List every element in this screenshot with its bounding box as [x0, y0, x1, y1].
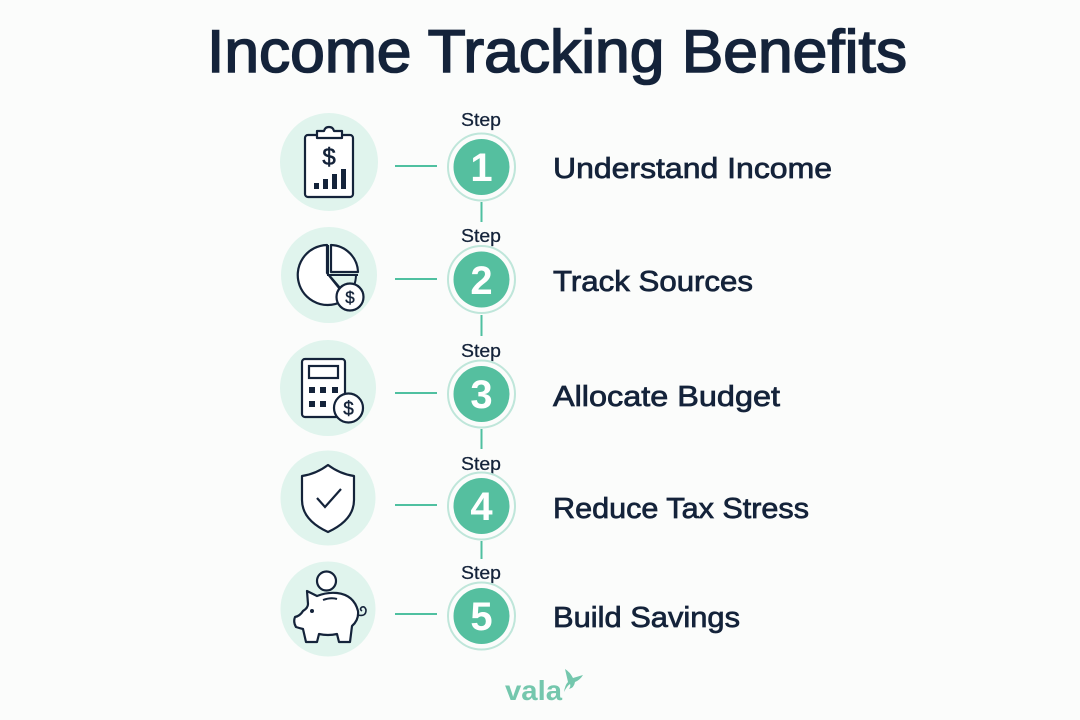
step badge 1: 1 [470, 146, 493, 190]
step row 1 [280, 109, 832, 211]
step label: Step [461, 453, 501, 474]
icon: clipboard with chart [280, 113, 378, 211]
step badge 5: 5 [470, 595, 493, 639]
step row 3 [280, 340, 780, 436]
icon: calculator with coin: $ [343, 399, 354, 420]
connector [395, 613, 437, 615]
label: Track Sources [553, 266, 753, 298]
step label: Step [461, 109, 501, 130]
icon: pie chart with coin: $ [345, 288, 355, 307]
icon: shield with check [280, 450, 376, 546]
step badge 4: 4 [470, 485, 493, 529]
icon: clipboard with chart: $ [322, 144, 336, 171]
step badge 3 [448, 360, 515, 428]
step badge 4 [448, 472, 515, 540]
icon: hummingbird [564, 669, 583, 692]
label: Build Savings [553, 602, 740, 634]
label: Understand Income [553, 153, 832, 185]
icon: piggy bank with coin [280, 562, 376, 656]
connector [395, 278, 437, 280]
connector [395, 504, 437, 506]
step row 2 [281, 225, 753, 323]
logo: vala: vala [505, 675, 562, 706]
step label: Step [461, 340, 501, 361]
icon: calculator with coin [280, 340, 376, 436]
step badge 3: 3 [470, 373, 493, 417]
connector [395, 165, 437, 167]
step badge 2 [448, 246, 515, 313]
step label: Step [461, 225, 501, 246]
step badge 1 [448, 134, 515, 200]
step row 5 [280, 562, 740, 656]
label: Allocate Budget [553, 381, 780, 413]
step badge 2: 2 [470, 259, 493, 303]
logo: vala [505, 669, 583, 706]
icon: pie chart with coin [281, 227, 377, 323]
title: Income Tracking Benefits [207, 18, 907, 85]
step row 4 [280, 450, 809, 546]
label: Reduce Tax Stress [553, 493, 809, 525]
step label: Step [461, 562, 501, 583]
connector [395, 392, 437, 394]
spine connectors [480, 202, 482, 559]
step badge 5 [448, 582, 515, 650]
